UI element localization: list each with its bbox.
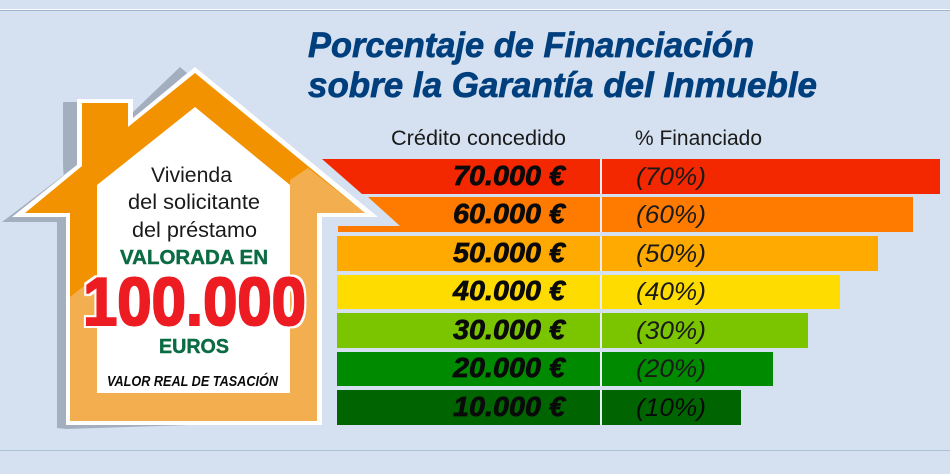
bar: 30%: 30.000 € bbox=[453, 314, 566, 345]
bar: 10%: 10.000 € bbox=[453, 391, 566, 422]
bar: 70%: 70.000 € bbox=[453, 160, 566, 191]
house text: 100.000 amount: 100.000 bbox=[83, 264, 306, 340]
bar: 20%: (20%) bbox=[636, 355, 706, 383]
bar: 50%: (50%) bbox=[636, 240, 706, 268]
house shadow bbox=[2, 102, 190, 429]
bar: 70% bbox=[322, 159, 940, 194]
house light orange shading bbox=[70, 168, 365, 421]
bar: 10%: (10%) bbox=[636, 394, 706, 422]
house white interior bbox=[97, 107, 290, 393]
house text: valorada en: VALORADA EN bbox=[120, 247, 268, 269]
bar: 50% bbox=[337, 236, 878, 271]
bar: 20%: 20.000 € bbox=[452, 352, 566, 383]
house illustration bbox=[2, 67, 378, 429]
title: Porcentaje de Financiación bbox=[308, 26, 754, 65]
bar: 70%: (70%) bbox=[636, 163, 706, 191]
bar: 40%: 40.000 € bbox=[452, 275, 566, 306]
column headers: Crédito concedido bbox=[391, 127, 566, 150]
title: sobre la Garantía del Inmueble bbox=[308, 66, 817, 105]
house text: description: del préstamo bbox=[132, 219, 257, 242]
bar: 60% bbox=[338, 197, 913, 232]
house text: valor real de tasacion: VALOR REAL DE TASACIÓN bbox=[107, 372, 279, 390]
column headers: % Financiado bbox=[635, 127, 762, 150]
bar: 50%: 50.000 € bbox=[453, 237, 566, 268]
bar: 30%: (30%) bbox=[636, 317, 706, 345]
bar: 60%: 60.000 € bbox=[453, 198, 566, 229]
house white outline bbox=[12, 67, 378, 425]
bar: 10% bbox=[337, 390, 741, 425]
house orange body bbox=[25, 73, 365, 421]
bar: 20% bbox=[337, 352, 773, 386]
house text: description: Vivienda bbox=[151, 164, 232, 187]
bar: 60%: (60%) bbox=[636, 201, 706, 229]
bar: 30% bbox=[337, 313, 808, 348]
bar: 40%: (40%) bbox=[636, 278, 706, 306]
title bbox=[308, 26, 817, 105]
bar chart bbox=[322, 159, 940, 425]
house text: euros: EUROS bbox=[159, 336, 229, 358]
bar: 40% bbox=[337, 275, 840, 309]
column headers bbox=[391, 127, 762, 150]
house text: description bbox=[128, 164, 260, 242]
house text: description: del solicitante bbox=[128, 191, 260, 214]
